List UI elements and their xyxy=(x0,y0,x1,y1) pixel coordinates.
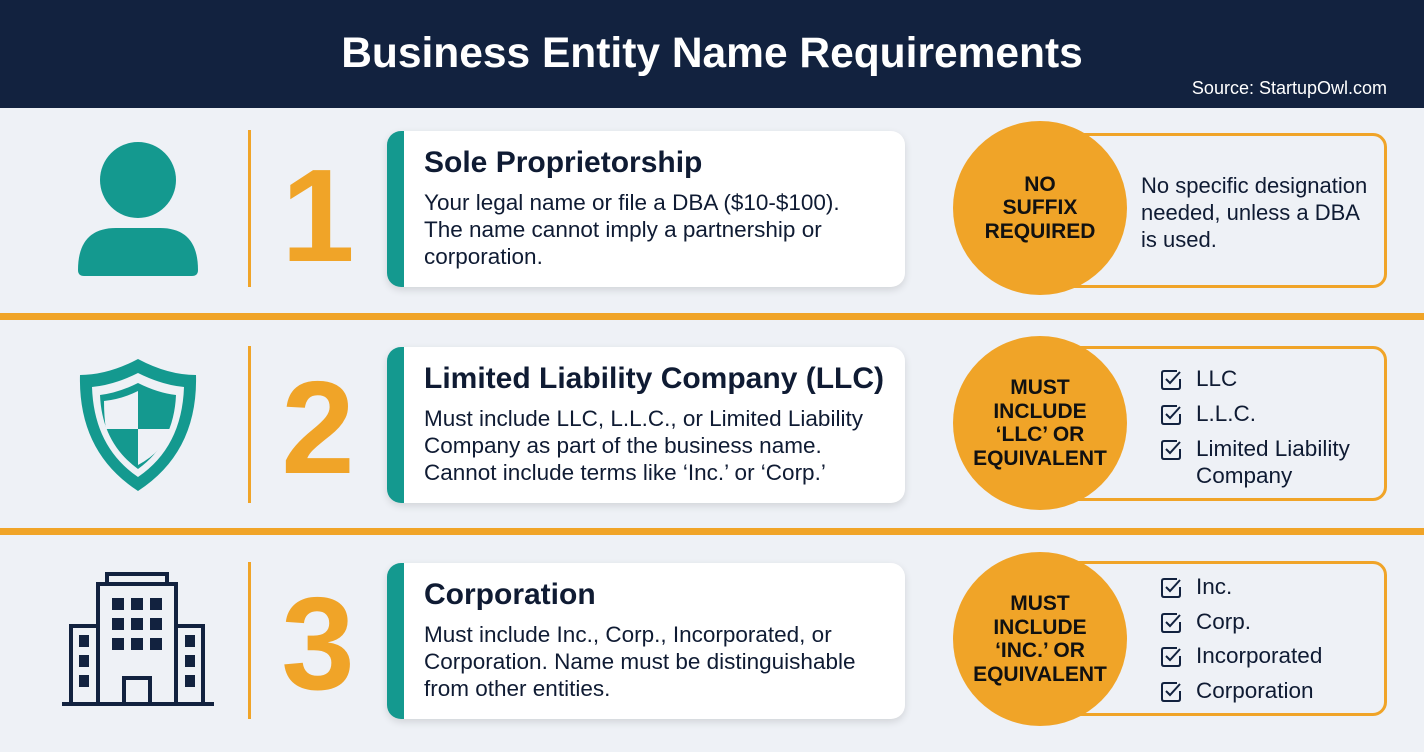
circle 2 xyxy=(953,336,1127,510)
circle 2: ‘LLC’ OR xyxy=(996,423,1084,446)
text 1: No specific designation xyxy=(1141,173,1367,198)
list 2: Company xyxy=(1196,463,1292,488)
circle 3: INCLUDE xyxy=(993,616,1087,638)
list 2: LLC xyxy=(1196,366,1237,391)
circle 3: ‘INC.’ OR xyxy=(995,639,1085,662)
card: corporation xyxy=(387,563,905,719)
icon: shield xyxy=(80,359,196,491)
card: corporation: Corporation xyxy=(424,578,596,611)
text 1: is used. xyxy=(1141,227,1217,252)
circle 1: REQUIRED xyxy=(985,220,1095,243)
card: sole proprietorship: Your legal name or file a DBA ($10-$100). xyxy=(424,190,840,215)
header xyxy=(0,0,1424,108)
circle 1: SUFFIX xyxy=(1003,196,1077,219)
text 1: needed, unless a DBA xyxy=(1141,200,1360,225)
list 3: Incorporated xyxy=(1196,643,1322,668)
list 3: Corp. xyxy=(1196,608,1251,634)
number 1: 1 xyxy=(281,142,355,289)
card: sole proprietorship: corporation. xyxy=(424,244,543,269)
card: LLC: Limited Liability Company (LLC) xyxy=(424,362,884,395)
card: sole proprietorship: The name cannot imply a partnership or xyxy=(424,217,822,242)
list 3: Corporation xyxy=(1196,678,1314,702)
circle 1: NO xyxy=(1024,173,1056,196)
number 3: 3 xyxy=(281,570,355,717)
card: sole proprietorship xyxy=(387,131,905,287)
card: corporation: Corporation. Name must be distinguishable xyxy=(424,649,855,674)
circle 3 xyxy=(953,552,1127,726)
circle 2: INCLUDE xyxy=(993,400,1087,422)
list 2: L.L.C. xyxy=(1196,400,1256,426)
box 2 xyxy=(1040,346,1387,501)
list 3: Inc. xyxy=(1196,574,1232,599)
list 3 xyxy=(1161,574,1322,702)
header: Source: StartupOwl.com xyxy=(1192,78,1387,98)
card: corporation: from other entities. xyxy=(424,676,610,701)
circle 3: MUST xyxy=(1010,592,1070,615)
card: LLC: Must include LLC, L.L.C., or Limited Liability xyxy=(424,406,863,431)
icon: person xyxy=(78,142,198,276)
card: LLC xyxy=(387,347,905,503)
header: Business Entity Name Requirements xyxy=(341,30,1083,77)
box 1 xyxy=(1040,133,1387,288)
card: LLC: Company as part of the business name. xyxy=(424,433,822,458)
box 3 xyxy=(1040,561,1387,716)
card: LLC: Cannot include terms like ‘Inc.’ or ‘Corp.’ xyxy=(424,460,826,485)
circle 2: EQUIVALENT xyxy=(973,446,1107,470)
circle 1 xyxy=(953,121,1127,295)
number 2: 2 xyxy=(281,354,355,501)
card: corporation: Must include Inc., Corp., Incorporated, or xyxy=(424,622,832,647)
text 1 xyxy=(1141,173,1367,252)
icon: building xyxy=(62,572,214,706)
circle 3: EQUIVALENT xyxy=(973,662,1107,686)
card: sole proprietorship: Sole Proprietorship xyxy=(424,146,702,179)
circle 2: MUST xyxy=(1010,376,1070,399)
list 2 xyxy=(1161,366,1350,488)
list 2: Limited Liability xyxy=(1196,436,1350,461)
